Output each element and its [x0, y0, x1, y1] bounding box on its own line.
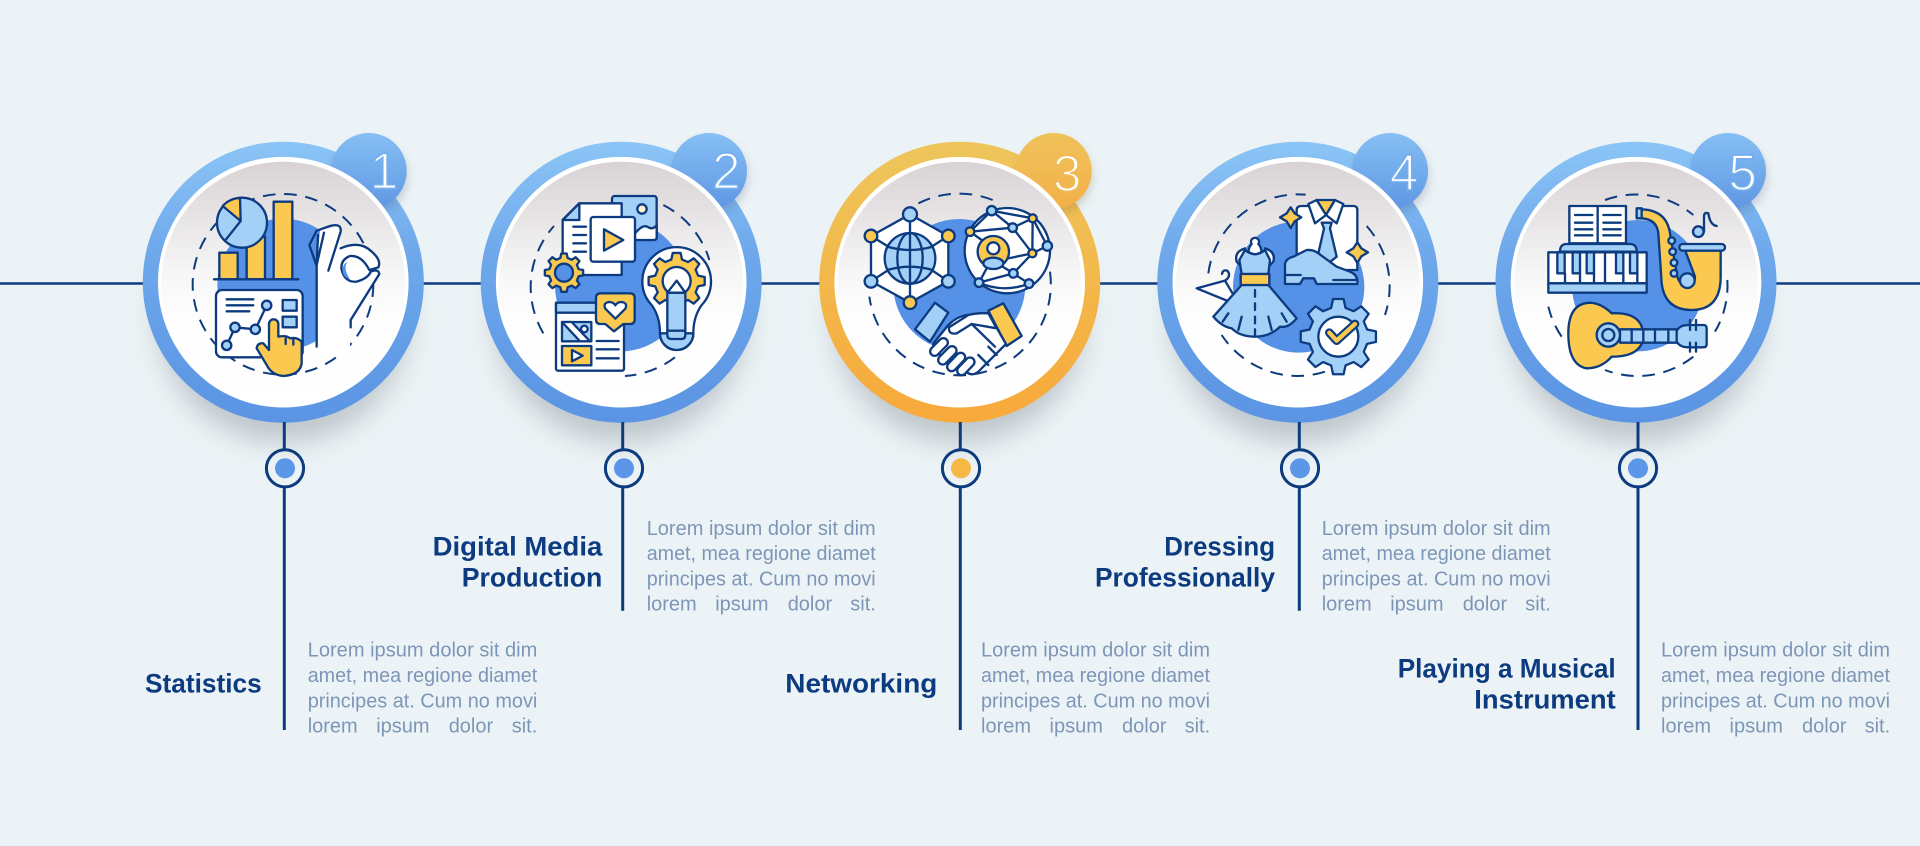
text block 5: amet, mea regione diamet [1661, 665, 1890, 687]
connector 3 [942, 422, 980, 730]
ring 3 [819, 142, 1100, 442]
text block 1: dolor [449, 716, 499, 738]
text block 1: sit. [512, 716, 537, 738]
text block 1: principes at. Cum no movi [308, 690, 537, 712]
heading: Dressing Professionally [1095, 532, 1275, 593]
panel: step 5 Playing a Musical Instrument [1398, 133, 1890, 738]
text block 1: amet, mea regione diamet [308, 665, 538, 687]
icon: dress, shirt, shoe and gear [1197, 194, 1390, 376]
number badge 1: 1 [370, 142, 398, 200]
text block 2: Lorem ipsum dolor sit dim [647, 518, 876, 540]
panel: step 4 Dressing Professionally [1095, 133, 1551, 616]
ring 5 [1496, 142, 1776, 442]
text block 4: ipsum [1390, 594, 1449, 616]
inner plate 5 [1511, 157, 1761, 408]
text block 2: principes at. Cum no movi [647, 568, 876, 590]
connector 5 [1619, 422, 1657, 730]
text block 2: lorem [647, 594, 702, 616]
text block 4: lorem [1322, 594, 1377, 616]
text block 4 [1322, 518, 1551, 616]
panel: step 1 Statistics [143, 133, 538, 738]
timeline: horizontal line [0, 282, 1920, 285]
text block 3: Lorem ipsum dolor sit dim [981, 640, 1210, 662]
icon: networking and handshake [865, 194, 1052, 375]
heading: Playing a Musical Instrument: Playing a Musical [1398, 653, 1616, 683]
text block 5: principes at. Cum no movi [1661, 690, 1890, 712]
text block 1: Lorem ipsum dolor sit dim [308, 640, 537, 662]
text block 2: sit. [850, 594, 876, 616]
connector 1 [266, 422, 304, 730]
heading: Playing a Musical Instrument: Instrument [1474, 684, 1616, 714]
text block 4: amet, mea regione diamet [1322, 543, 1551, 565]
text block 1: lorem [308, 716, 363, 738]
text block 3: amet, mea regione diamet [981, 665, 1210, 687]
text block 5: ipsum [1730, 716, 1788, 738]
text block 4: Lorem ipsum dolor sit dim [1322, 518, 1551, 540]
number badge 5 [1690, 133, 1766, 214]
inner plate 3 [834, 157, 1085, 408]
number badge 4: 4 [1390, 144, 1418, 201]
ring 1 [143, 142, 424, 442]
heading: Playing a Musical Instrument [1398, 653, 1616, 714]
icon: digital media production [531, 196, 711, 376]
number badge 4 [1352, 133, 1428, 214]
number badge 5: 5 [1729, 144, 1757, 201]
ring 4 [1157, 142, 1438, 442]
heading: Digital Media Production [433, 531, 603, 593]
connector 4 [1281, 422, 1319, 611]
heading: Dressing Professionally: Professionally [1095, 563, 1275, 593]
text block 5 [1661, 640, 1890, 738]
icon: statistics charts and hands [193, 194, 379, 376]
text block 2: ipsum [715, 594, 774, 616]
text block 5: Lorem ipsum dolor sit dim [1661, 640, 1890, 662]
ring 2 [481, 142, 762, 442]
text block 5: lorem [1661, 716, 1717, 738]
inner plate 2 [496, 157, 746, 408]
heading: Networking: Networking [785, 669, 937, 699]
text block 3: ipsum [1050, 716, 1108, 738]
text block 3: lorem [981, 716, 1037, 738]
heading: Statistics: Statistics [145, 669, 262, 699]
text block 3: sit. [1185, 716, 1210, 738]
number badge 3 [1016, 133, 1092, 214]
number badge 1 [331, 133, 407, 214]
text block 2: amet, mea regione diamet [647, 543, 876, 565]
text block 1 [308, 640, 538, 738]
text block 4: sit. [1525, 594, 1551, 616]
number badge 2: 2 [712, 142, 740, 200]
text block 2: dolor [788, 594, 838, 616]
heading: Digital Media Production: Digital Media [433, 531, 603, 561]
text block 1: ipsum [376, 716, 435, 738]
heading: Digital Media Production: Production [462, 563, 602, 593]
number badge 2 [671, 133, 748, 214]
connector 2 [605, 422, 643, 611]
text block 2 [647, 518, 876, 616]
text block 3: principes at. Cum no movi [981, 690, 1210, 712]
panel: step 2 Digital Media Production [433, 133, 876, 616]
text block 4: principes at. Cum no movi [1322, 568, 1551, 590]
text block 3: dolor [1122, 716, 1172, 738]
text block 5: dolor [1802, 716, 1852, 738]
icon: piano, saxophone and guitar [1548, 195, 1728, 376]
number badge 3: 3 [1053, 145, 1081, 202]
text block 5: sit. [1865, 716, 1890, 738]
inner plate 1 [158, 157, 409, 408]
heading: Dressing Professionally: Dressing [1164, 532, 1275, 562]
text block 4: dolor [1463, 594, 1513, 616]
text block 3 [981, 640, 1210, 738]
inner plate 4 [1172, 157, 1423, 408]
panel: step 3 Networking [785, 133, 1210, 738]
